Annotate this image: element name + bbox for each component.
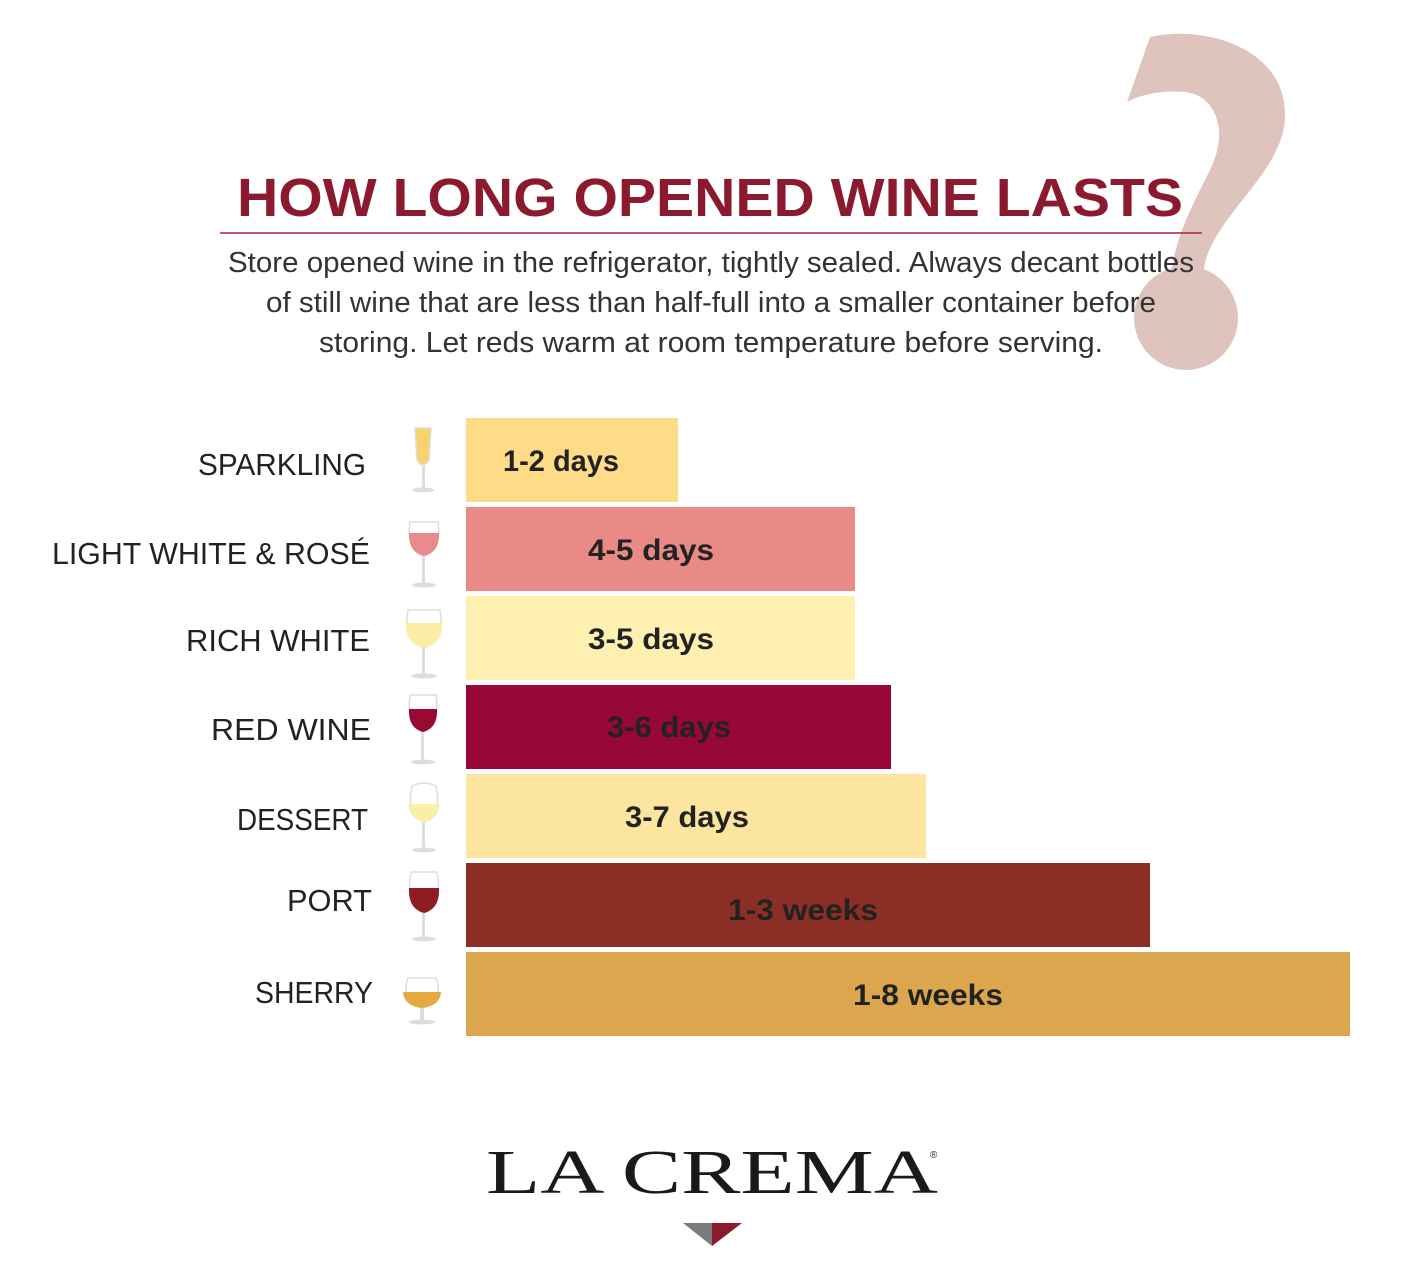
title: HOW LONG OPENED WINE LASTS [237, 168, 1183, 228]
icon: dessert glass [408, 783, 440, 852]
subtitle: storing. Let reds warm at room temperature before serving. [319, 327, 1103, 359]
subtitle: of still wine that are less than half-full into a smaller container before [266, 287, 1156, 319]
logo: La Crema [486, 1139, 938, 1246]
logo: La Crema: ® [930, 1150, 938, 1161]
labels: DESSERT [237, 802, 368, 837]
icon: port glass [409, 872, 439, 942]
decorative question mark [1127, 34, 1285, 370]
bar chart: 1-8 weeks [853, 979, 1003, 1012]
labels: LIGHT WHITE & ROSÉ [52, 536, 370, 571]
labels: SPARKLING [198, 447, 366, 482]
icon: rose glass [409, 522, 439, 588]
bar chart: 3-7 days [625, 801, 749, 834]
bar chart: 4-5 days [588, 534, 714, 567]
bar chart: 1-3 weeks [728, 894, 878, 927]
labels [52, 447, 373, 1010]
labels: RICH WHITE [186, 623, 370, 658]
logo: La Crema: LA CREMA [486, 1139, 938, 1207]
bar chart [466, 418, 1350, 1036]
icon: sherry glass [403, 978, 441, 1024]
icon: rich white glass [406, 610, 442, 678]
icon: red wine glass [409, 695, 437, 764]
bar chart: 3-6 days [607, 711, 731, 744]
subtitle [228, 247, 1194, 359]
labels: SHERRY [255, 975, 373, 1010]
bar chart: 3-5 days [588, 623, 714, 656]
labels: PORT [287, 883, 372, 918]
labels: RED WINE [211, 712, 371, 747]
subtitle: Store opened wine in the refrigerator, tightly sealed. Always decant bottles [228, 247, 1194, 279]
icon: sparkling glass [412, 428, 434, 492]
bar chart: 1-2 days [503, 445, 619, 478]
